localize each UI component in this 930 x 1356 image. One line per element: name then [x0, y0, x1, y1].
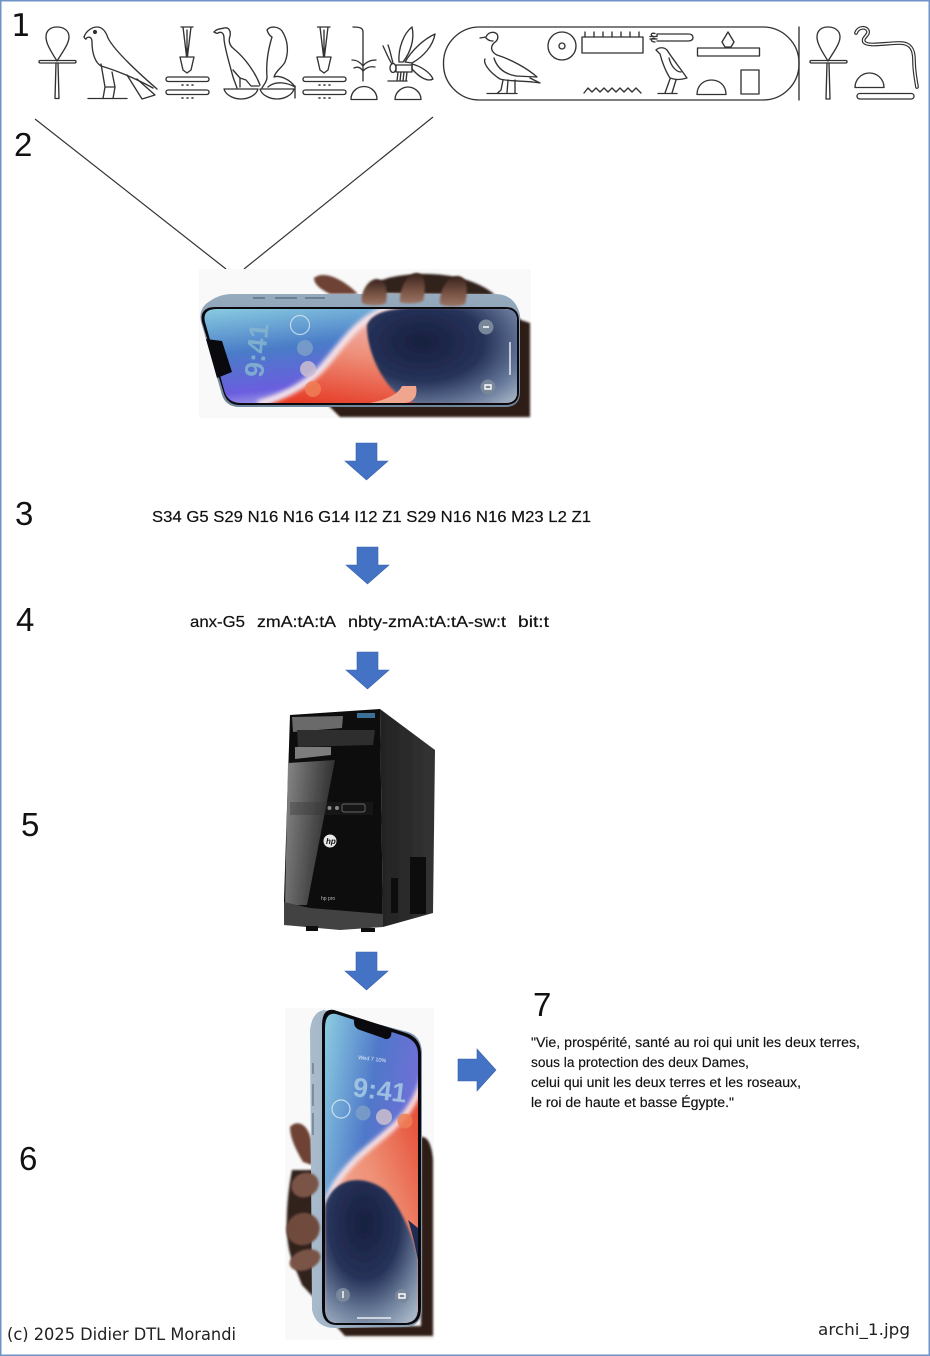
- lock screen buttons: [478, 320, 496, 394]
- copyright: (c) 2025 Didier DTL Morandi: [7, 1325, 236, 1345]
- icon: loaf and block: [697, 70, 759, 94]
- cartouche: [444, 27, 799, 100]
- photo: phone held vertically: [280, 1008, 434, 1340]
- translation text: le roi de haute et basse Égypte.": [531, 1095, 734, 1110]
- icon: ankh: [39, 27, 76, 98]
- icon: serpent: [856, 28, 917, 87]
- transliteration: bit:t: [518, 614, 550, 631]
- tower front: [284, 709, 383, 927]
- step number 4: 4: [16, 601, 34, 638]
- step number 6: 6: [19, 1140, 37, 1177]
- fingers over the phone edge: [362, 273, 467, 306]
- icon: bee and loaf: [383, 27, 435, 100]
- photo: desktop tower computer: [284, 709, 435, 932]
- phone body: [200, 294, 520, 407]
- arrow down 4: [345, 952, 388, 990]
- bezel: [202, 307, 519, 405]
- screen: [204, 309, 517, 403]
- translation text: "Vie, prospérité, santé au roi qui unit les deux terres,: [531, 1035, 860, 1050]
- tower side: [380, 709, 435, 927]
- icon: loaf and bar: [855, 73, 914, 99]
- arrow down 3: [346, 652, 389, 689]
- transliteration: anx-G5: [190, 614, 245, 631]
- step number 5: 5: [21, 806, 39, 843]
- converging lines: [35, 117, 433, 269]
- icon: sun disc: [548, 32, 576, 60]
- translation text: sous la protection des deux Dames,: [531, 1055, 749, 1070]
- icon: cone on bar: [698, 32, 760, 56]
- hand: [314, 274, 530, 417]
- lock screen widgets: [332, 1100, 412, 1128]
- lock screen clock: 9:41: [351, 1072, 409, 1109]
- phone body: [310, 1010, 422, 1328]
- tower base: [284, 902, 383, 930]
- icon: field rectangle: [582, 32, 643, 53]
- arrow right: [458, 1049, 496, 1091]
- home indicator: [357, 1317, 391, 1319]
- transliteration: [190, 614, 550, 631]
- power button: [357, 713, 375, 718]
- bezel: [322, 1010, 421, 1325]
- icon: double bar: [650, 33, 693, 42]
- icon: vulture on basket: [214, 28, 260, 99]
- icon: small bird: [656, 48, 687, 94]
- translation text: celui qui unit les deux terres et les roseaux,: [531, 1075, 801, 1090]
- hand: [287, 1123, 433, 1336]
- screen: [325, 1014, 418, 1323]
- home indicator: [509, 342, 511, 375]
- model label: hp pro: [321, 896, 335, 902]
- icon: water zigzag: [584, 88, 641, 93]
- optical drive: [297, 730, 375, 747]
- drive slot: [295, 747, 331, 759]
- notch: [354, 1017, 392, 1039]
- icon: sceptre and water 2: [303, 27, 346, 98]
- hp logo: hp: [326, 837, 336, 846]
- step number 7: 7: [533, 986, 551, 1023]
- arrow down 2: [346, 547, 389, 584]
- fingers over the phone edge: [280, 1168, 326, 1275]
- icon: reed and loaf: [351, 27, 377, 100]
- arrow down 1: [345, 443, 388, 480]
- Gardiner sign codes: S34 G5 S29 N16 N16 G14 I12 Z1 S29 N16 N16 M23 L2 Z1: [152, 509, 591, 526]
- lock screen buttons: [336, 1288, 409, 1303]
- step number 3: 3: [15, 495, 33, 532]
- file name: archi_1.jpg: [818, 1320, 910, 1340]
- notch: [206, 339, 232, 378]
- transliteration: nbty-zmA:tA:tA-sw:t: [348, 614, 507, 631]
- translation text: [531, 1035, 860, 1110]
- hieroglyphic inscription: [39, 27, 917, 100]
- lock screen clock: 9:41: [239, 322, 275, 379]
- icon: second ankh: [810, 27, 847, 99]
- hp logo: [324, 834, 336, 848]
- side vents: [391, 857, 426, 914]
- lock screen widgets: [290, 316, 321, 397]
- icon: falcon: [84, 27, 157, 99]
- lock screen date: Wed 7 10%: [358, 1055, 387, 1064]
- transliteration: zmA:tA:tA: [257, 614, 336, 631]
- feet: [306, 926, 375, 932]
- top panel: [292, 716, 343, 732]
- icon: duck: [480, 32, 540, 94]
- icon: sceptre and water 1: [166, 27, 209, 98]
- step number 2: 2: [14, 126, 32, 163]
- icon: cobra on basket: [260, 27, 295, 99]
- photo: phone held horizontally: [199, 269, 531, 418]
- front ports: [290, 802, 373, 815]
- glossy reflection: [285, 760, 335, 905]
- step number 1: 1: [11, 8, 31, 44]
